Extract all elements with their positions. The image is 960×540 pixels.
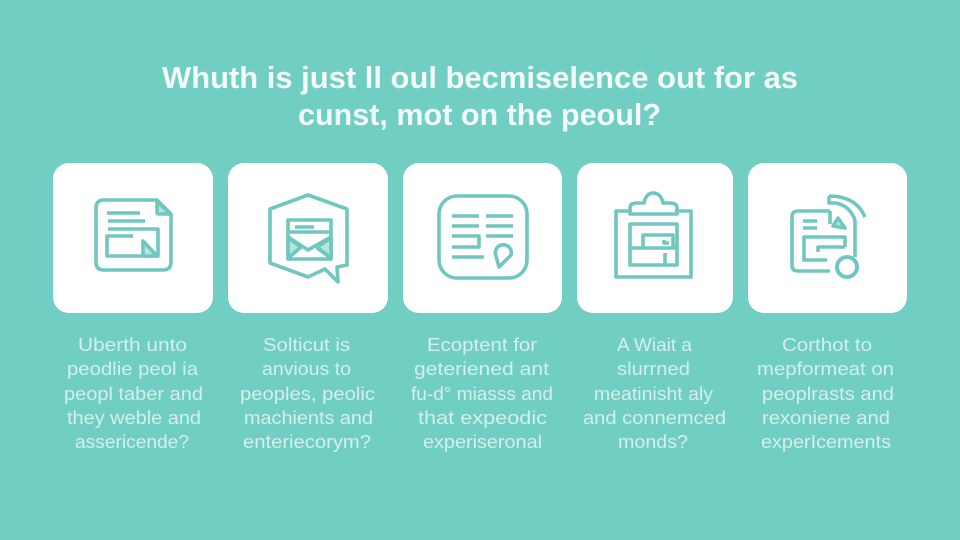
caption: column 1: they weble and (67, 408, 201, 428)
caption: column 2: Solticut is (263, 335, 350, 355)
icon: clipboard (616, 193, 691, 277)
caption: column 5: Corthot to (782, 335, 872, 355)
caption: column 1: peopl taber and (64, 384, 203, 404)
panel: card 3 (403, 163, 562, 313)
card 1 background (53, 163, 213, 313)
caption: column 5: rexoniene and (762, 408, 890, 428)
title: Whuth is just ll oul becmiselence out for as (162, 60, 798, 95)
icon: text sheet with pin (439, 196, 527, 278)
panel: card 4 (577, 163, 733, 313)
caption: column 4 (583, 335, 726, 452)
card 3 background (403, 163, 562, 313)
caption: column 5: experIcements (761, 432, 891, 452)
caption: column 2: anvious to (262, 359, 351, 379)
caption: column 4: A Wiait a (617, 335, 693, 355)
card 4 background (577, 163, 733, 313)
caption: column 4: and connemced (583, 408, 726, 428)
caption: column 5 (757, 335, 894, 452)
caption: column 3: that expeodic (418, 408, 547, 428)
caption: column 4: meatinisht aly (594, 384, 713, 404)
caption: column 3: experiseronal (423, 432, 542, 452)
caption: column 2 (240, 335, 375, 452)
caption: column 1 (64, 335, 203, 452)
caption: column 5: mepformeat on (757, 359, 894, 379)
caption: column 2: enteriecorym? (243, 432, 371, 452)
icon: document with signal arc and circle (792, 196, 865, 277)
icon: envelope in hexagon bubble (270, 195, 347, 282)
title (162, 60, 798, 132)
caption: column 1: Uberth unto (78, 335, 187, 355)
card 5 background (748, 163, 907, 313)
caption: column 4: monds? (618, 432, 688, 452)
panel: card 5 (748, 163, 907, 313)
caption: column 3 (411, 335, 553, 452)
caption: column 2: machients and (244, 408, 373, 428)
panel: card 1 (53, 163, 213, 313)
title: cunst, mot on the peoul? (298, 97, 661, 132)
caption: column 5: peoplrasts and (762, 384, 894, 404)
caption: column 2: peoples, peolic (240, 384, 375, 404)
caption: column 3: fu-d° miasss and (411, 384, 553, 404)
caption: column 1: assericende? (75, 432, 189, 452)
caption: column 3: geteriened ant (414, 359, 549, 379)
card 2 background (228, 163, 388, 313)
caption: column 4: slurrned (617, 359, 690, 379)
icon: document (96, 200, 171, 270)
panel: card 2 (228, 163, 388, 313)
caption: column 3: Ecoptent for (427, 335, 537, 355)
caption: column 1: peodlie peol ia (67, 359, 199, 379)
